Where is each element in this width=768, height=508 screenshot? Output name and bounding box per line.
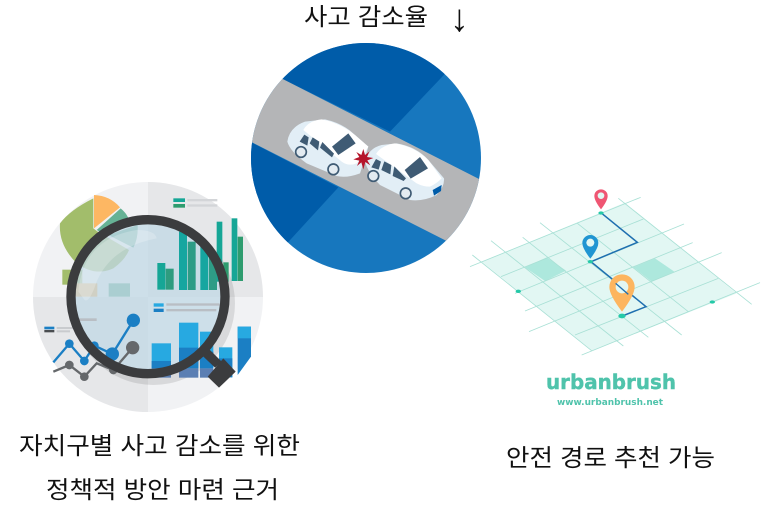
icon: orange pin — [609, 274, 635, 312]
bar chart: blue — [152, 303, 251, 378]
icon: collision spark — [353, 149, 373, 169]
icon: right car — [365, 143, 444, 200]
title: accident reduction rate — [304, 0, 469, 40]
caption: policy basis: 정책적 방안 마련 근거 — [46, 477, 279, 504]
route line — [591, 213, 646, 316]
icon: blue pin — [582, 235, 598, 259]
icon: magnifying glass — [71, 220, 236, 388]
icon: isometric map with route — [470, 189, 760, 355]
map nodes — [516, 211, 715, 318]
logo: urbanbrush: www.urbanbrush.net — [557, 398, 664, 408]
icon: car collision circle — [251, 43, 481, 273]
icon: red pin — [594, 189, 608, 209]
bar chart: teal — [157, 198, 243, 290]
block legend — [62, 270, 130, 297]
title: accident reduction rate: 사고 감소율 — [304, 4, 428, 31]
caption: policy basis — [19, 433, 300, 504]
line chart — [44, 314, 140, 381]
icon: left car — [287, 119, 368, 177]
pie chart — [60, 195, 138, 272]
highlighted map blocks — [525, 257, 674, 282]
icon: data analysis magnifier circle — [33, 182, 263, 412]
map grid — [470, 197, 760, 355]
logo: urbanbrush: urbanbrush — [546, 370, 676, 394]
logo: urbanbrush — [546, 370, 676, 408]
magnifier shadow and lens tint — [72, 222, 235, 385]
caption: policy basis: 자치구별 사고 감소를 위한 — [19, 433, 300, 460]
caption: safe route recommendation: 안전 경로 추천 가능 — [506, 445, 715, 472]
